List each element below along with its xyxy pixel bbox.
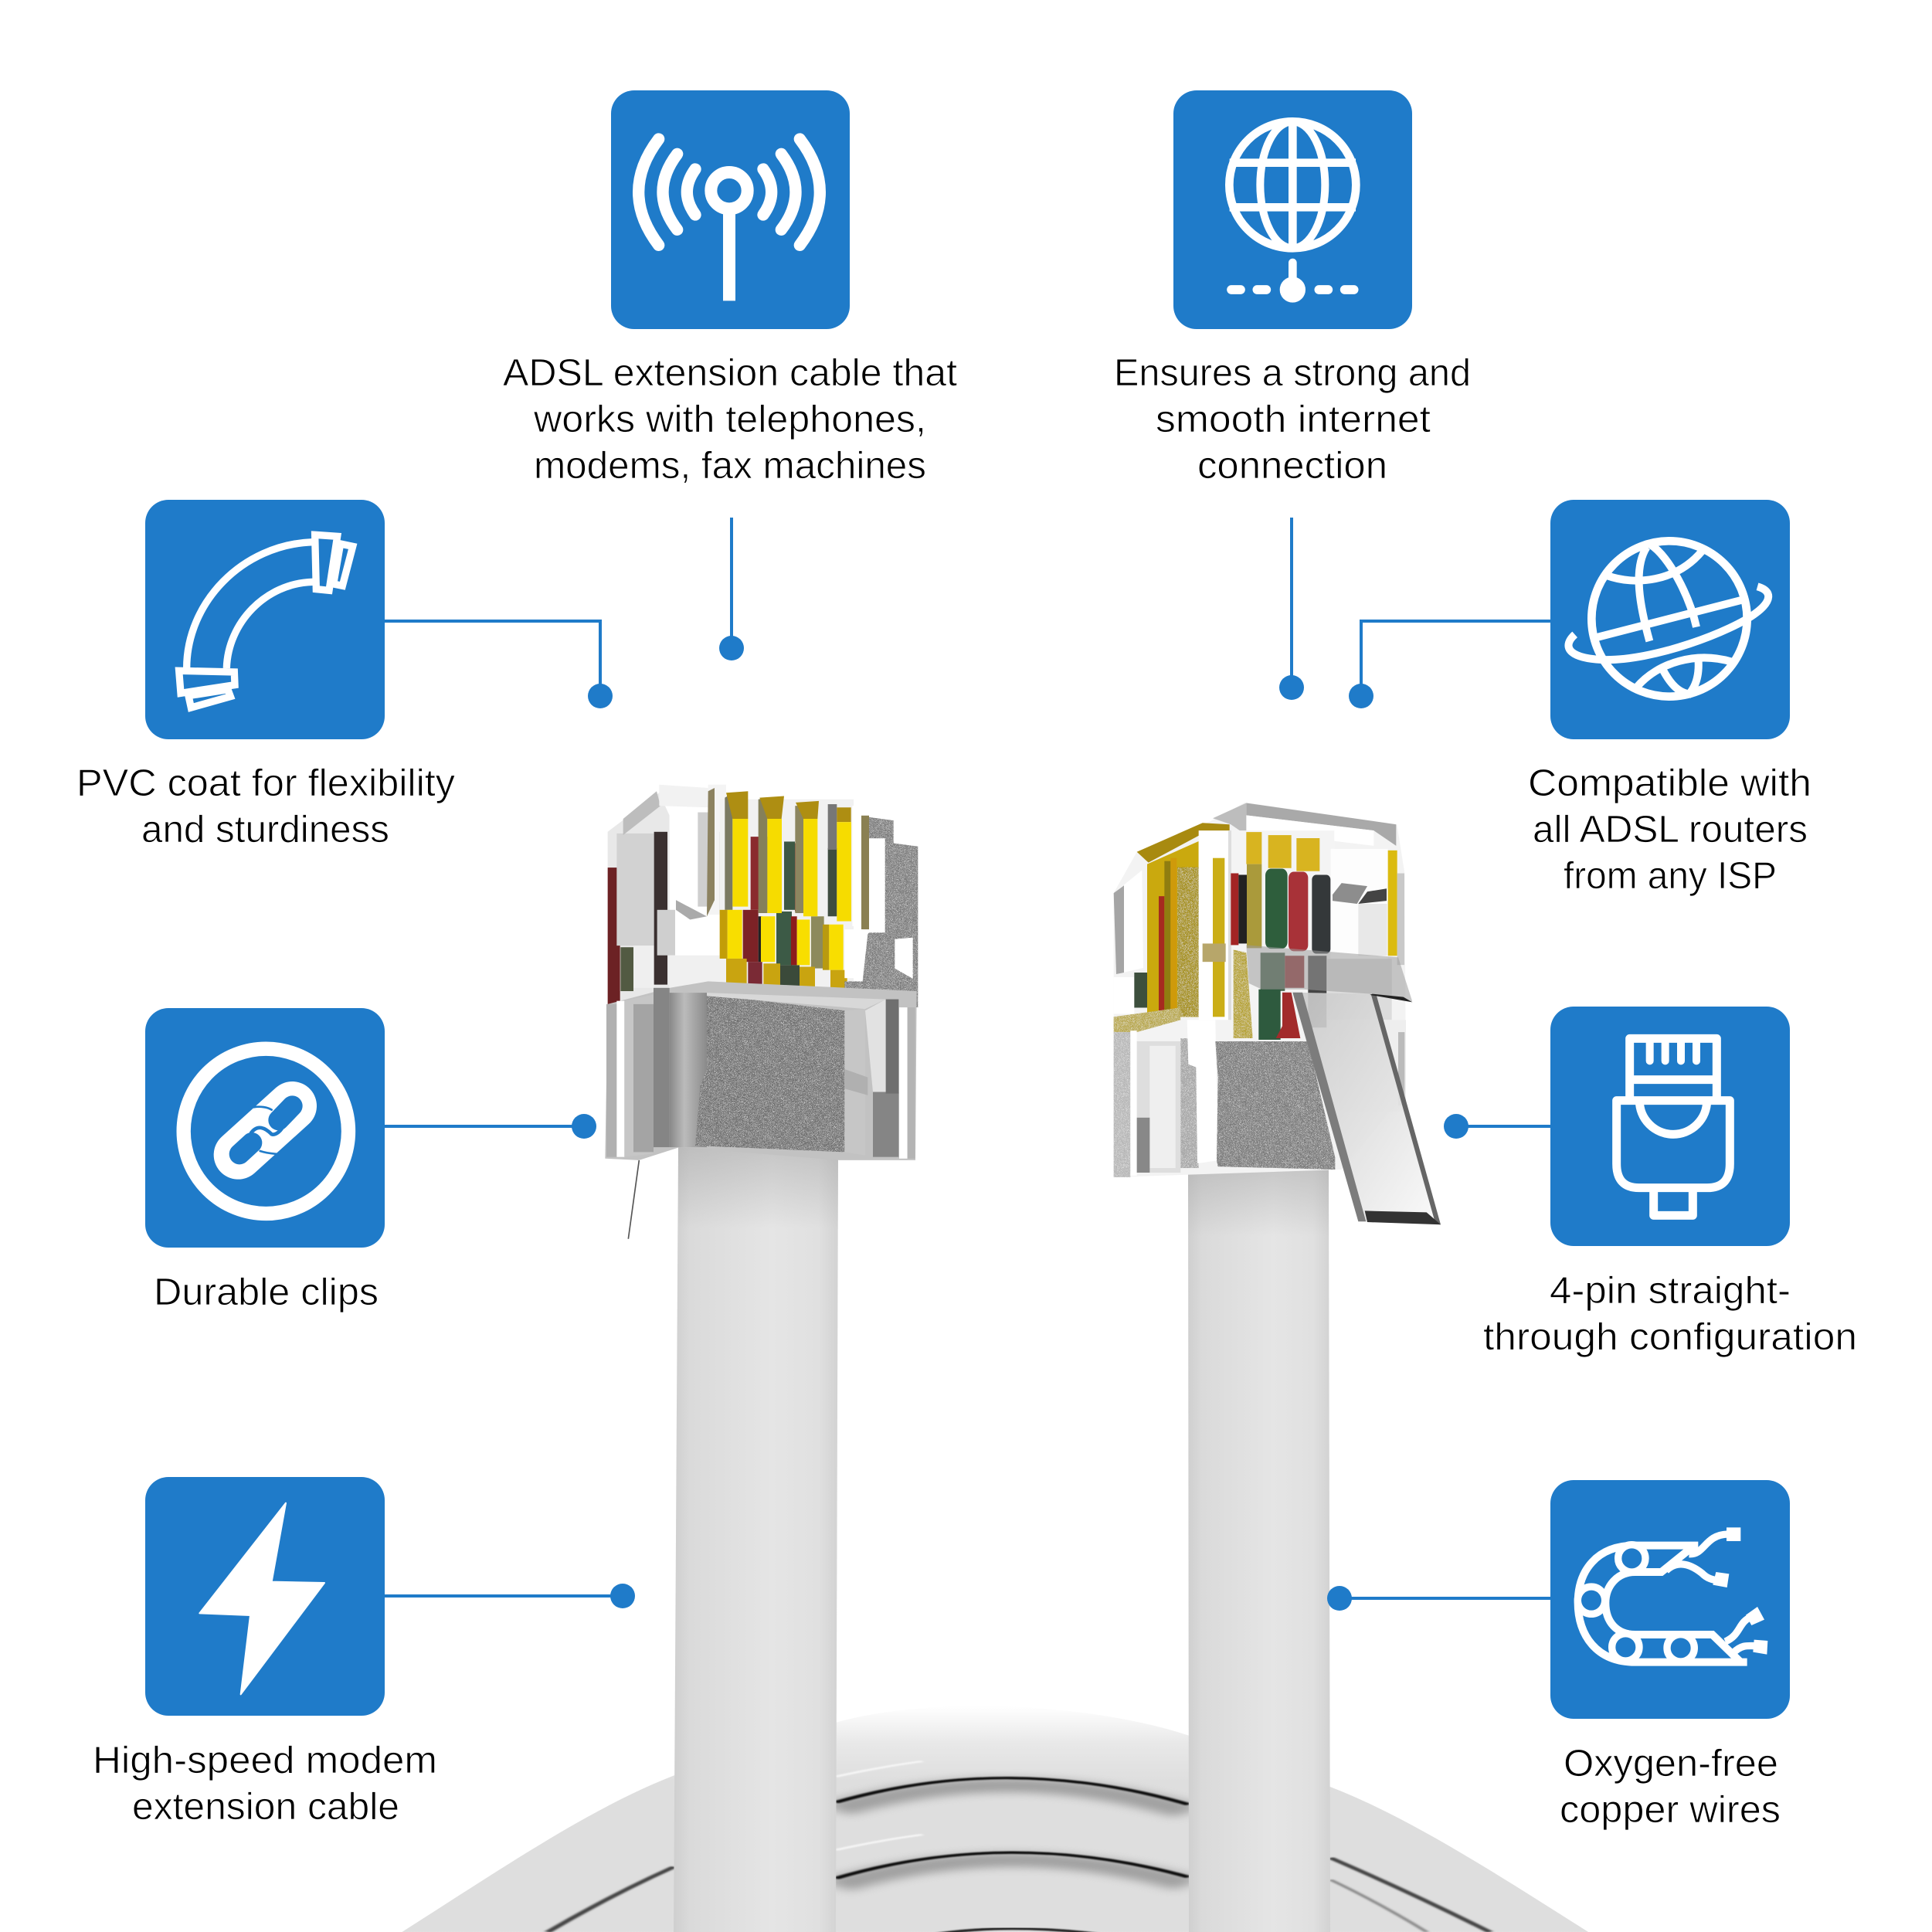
panel: 4-pin configuration bbox=[1444, 1007, 1857, 1358]
panel: PVC coat bbox=[76, 500, 613, 851]
caption bbox=[76, 762, 456, 851]
caption: modems, fax machines bbox=[534, 445, 926, 487]
caption: 4-pin straight- bbox=[1550, 1270, 1791, 1312]
caption: ADSL extension cable that bbox=[503, 352, 957, 394]
icon tile: chain link bbox=[145, 1008, 385, 1248]
icon: antenna signal bbox=[639, 139, 820, 300]
caption: all ADSL routers bbox=[1533, 809, 1808, 851]
panel: router compatibility bbox=[1349, 500, 1811, 897]
panel: ADSL extension cable bbox=[503, 90, 957, 660]
left cable bbox=[674, 1143, 838, 1932]
leader line bbox=[1349, 621, 1550, 708]
caption: through configuration bbox=[1483, 1316, 1857, 1358]
lower left clear section bbox=[1114, 1020, 1218, 1177]
caption: High-speed modem bbox=[93, 1740, 437, 1781]
left frame bbox=[1114, 871, 1147, 1014]
caption: Durable clips bbox=[154, 1272, 379, 1313]
caption: PVC coat for flexibility bbox=[76, 762, 456, 804]
caption bbox=[1114, 352, 1471, 487]
icon: network globe bbox=[1229, 121, 1356, 303]
icon tile: copper wires bbox=[1550, 1480, 1790, 1719]
icon: stripped cable with wires bbox=[1577, 1527, 1767, 1662]
yellow contact 1 bbox=[720, 791, 748, 986]
colored wires bbox=[1231, 832, 1330, 1040]
housing right shading bbox=[707, 993, 915, 1159]
caption bbox=[93, 1740, 437, 1828]
panel: copper wires bbox=[1327, 1480, 1790, 1831]
yellow contact 2 bbox=[759, 796, 784, 990]
caption: from any ISP bbox=[1564, 855, 1777, 897]
caption: works with telephones, bbox=[533, 399, 926, 440]
panel: internet connection bbox=[1114, 90, 1471, 700]
lower clear housing bbox=[605, 981, 917, 1160]
caption bbox=[1560, 1743, 1781, 1831]
caption: Oxygen-free bbox=[1564, 1743, 1778, 1784]
leader line bbox=[1279, 518, 1304, 700]
caption: copper wires bbox=[1560, 1789, 1781, 1831]
latch shelf bbox=[1246, 945, 1412, 1002]
leader line bbox=[1444, 1114, 1550, 1139]
caption: extension cable bbox=[132, 1786, 399, 1828]
icon: RJ plug bbox=[1617, 1038, 1730, 1215]
icon tile: globe network bbox=[1173, 90, 1412, 329]
clear right side bbox=[1327, 849, 1406, 1112]
icon tile: bent cable bbox=[145, 500, 385, 739]
clear right section bbox=[844, 806, 918, 1007]
left RJ connector bbox=[605, 785, 918, 1239]
icon tile: orbit globe bbox=[1550, 500, 1790, 739]
connector side face bbox=[608, 791, 670, 1017]
right RJ connector bbox=[1114, 803, 1441, 1224]
icon: bent cable bbox=[179, 535, 353, 708]
red and green wires bbox=[735, 837, 837, 1000]
leader line bbox=[385, 1114, 596, 1139]
yellow side face bbox=[1114, 823, 1230, 1032]
yellow contact 4 bbox=[823, 804, 851, 994]
panel: high-speed cable bbox=[93, 1477, 635, 1828]
speckled crimp block bbox=[1215, 1041, 1335, 1170]
coiled cable bbox=[402, 1720, 1588, 1932]
caption bbox=[1483, 1270, 1857, 1358]
rear flap bbox=[628, 1160, 639, 1239]
icon: orbit globe bbox=[1568, 541, 1768, 697]
leader line bbox=[1327, 1586, 1550, 1611]
clear body base bbox=[1114, 803, 1406, 1177]
latch tab bbox=[1292, 993, 1441, 1224]
top lid bbox=[1213, 803, 1396, 846]
caption bbox=[1528, 762, 1811, 897]
near clear column bbox=[1199, 830, 1231, 1020]
icon tile: lightning bbox=[145, 1477, 385, 1716]
yellow contact 3 bbox=[795, 801, 819, 994]
leader line bbox=[385, 1584, 635, 1608]
clear top section bbox=[657, 785, 728, 988]
caption: smooth internet bbox=[1156, 399, 1431, 440]
contact backdrop bbox=[720, 800, 854, 994]
leader line bbox=[719, 518, 744, 660]
panel: durable clips bbox=[145, 1008, 596, 1313]
wire backdrop bbox=[1231, 830, 1334, 1041]
icon: chain link in ring bbox=[184, 1049, 348, 1214]
caption bbox=[503, 352, 957, 487]
icon tile: antenna bbox=[611, 90, 850, 329]
leader line bbox=[385, 621, 613, 708]
speckled crimp block bbox=[695, 994, 844, 1152]
caption: Ensures a strong and bbox=[1114, 352, 1471, 394]
icon tile: RJ plug bbox=[1550, 1007, 1790, 1246]
caption: and sturdiness bbox=[141, 809, 389, 851]
icon: lightning bolt bbox=[199, 1503, 324, 1694]
caption: connection bbox=[1197, 445, 1387, 487]
right cable bbox=[1188, 1159, 1330, 1932]
caption: Compatible with bbox=[1528, 762, 1811, 804]
